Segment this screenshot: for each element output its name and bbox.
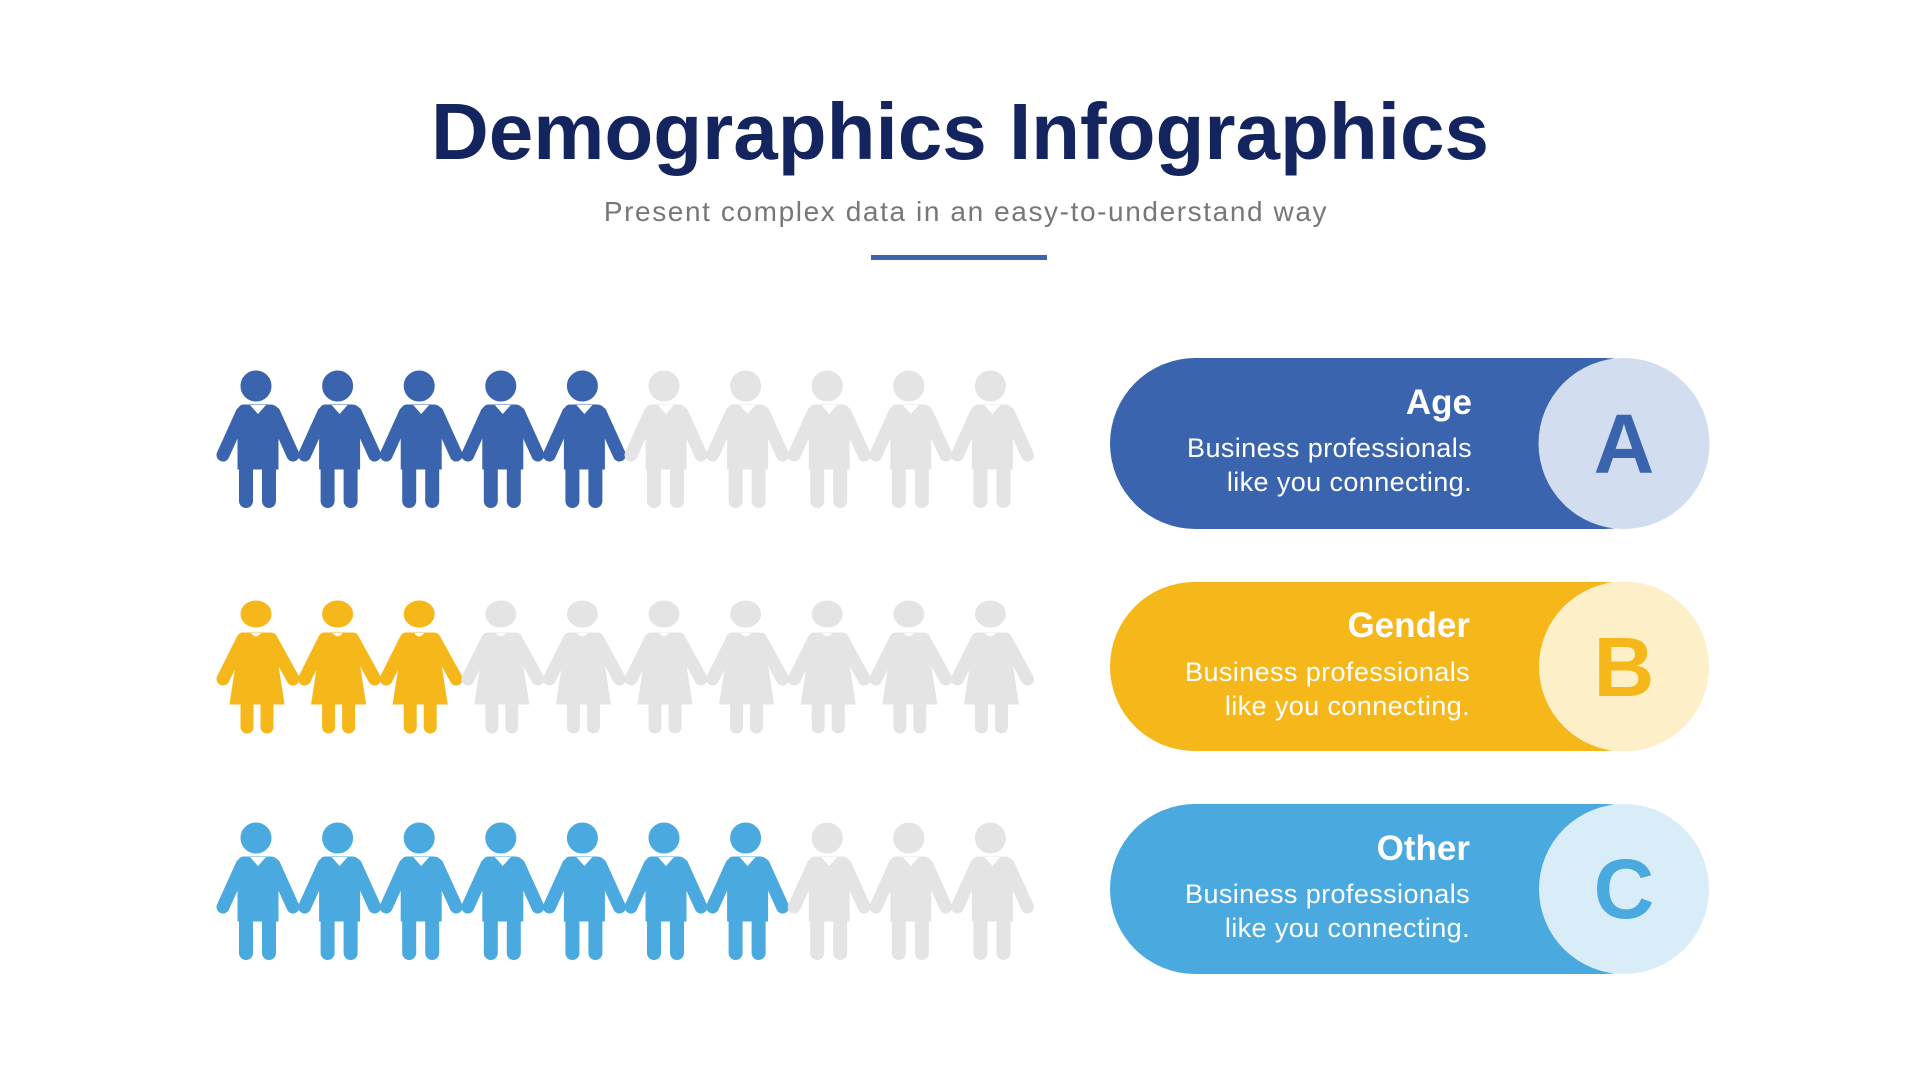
panel: other: Business professionals [1185, 879, 1470, 909]
row 1: age figures [223, 371, 1027, 501]
panel: other: Other [1377, 829, 1470, 868]
panel: gender: like you connecting. [1225, 691, 1470, 721]
row 2: gender figures [223, 601, 1027, 727]
underline [871, 255, 1047, 260]
panel: age: Business professionals [1187, 433, 1472, 463]
panel: other: like you connecting. [1225, 913, 1470, 943]
panel: gender [1110, 582, 1709, 752]
panel: other: C [1594, 842, 1654, 936]
panel: age: Age [1406, 383, 1472, 422]
panel: gender: Gender [1347, 606, 1470, 645]
row 3: other figures [223, 823, 1027, 953]
panel: age: A [1594, 397, 1654, 491]
panel: gender: Business professionals [1185, 657, 1470, 687]
subtitle: Present complex data in an easy-to-understand way [604, 196, 1328, 227]
panel: age [1110, 358, 1710, 529]
title: Demographics Infographics [431, 87, 1489, 176]
panel: gender: B [1594, 620, 1654, 714]
panel: age: like you connecting. [1227, 467, 1472, 497]
panel: other [1110, 804, 1709, 974]
